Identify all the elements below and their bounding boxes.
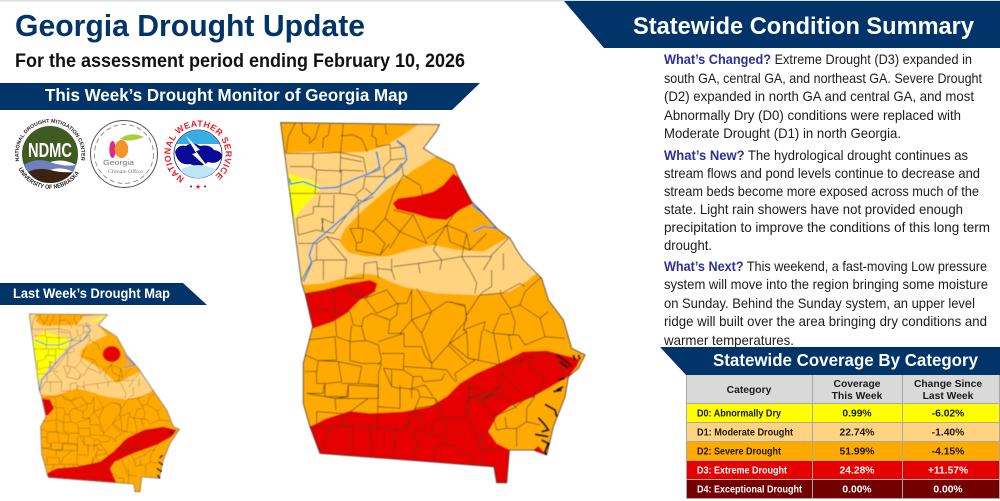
table: coverage by category [686, 375, 1000, 498]
row D3: 24.28% [840, 466, 874, 476]
map: this week's drought monitor of Georgia [280, 121, 586, 484]
row D1: -1.40% [932, 428, 964, 438]
row D1: 22.74% [840, 428, 874, 438]
text block: what's new: stream beds become more exposed across much of the [664, 183, 979, 199]
row D4: D4: Exceptional Drought [697, 484, 802, 496]
row D2 [686, 441, 1000, 460]
county lines [286, 123, 565, 465]
logo: National Weather Service: NATIONAL WEATHER SERVICE [164, 120, 232, 183]
row D4 [686, 479, 1000, 498]
row D3: D3: Extreme Drought [697, 466, 787, 476]
banner: this week's map: This Week’s Drought Monitor of Georgia Map [45, 85, 408, 105]
logo: Georgia Climate Office [90, 120, 158, 188]
D3 extreme drought: northeast [393, 173, 473, 220]
state outline [281, 123, 585, 483]
row D2: -4.15% [932, 446, 964, 458]
text block: what's new: state. Light rain showers have not provided enough [664, 201, 963, 217]
D0 abnormally dry region [287, 173, 321, 218]
text block: what's next: on Sunday. Behind the Sunday system, an upper level [664, 295, 975, 311]
rivers [289, 141, 497, 282]
text block: what's changed: Abnormally Dry (D0) conditions were replaced with [664, 107, 961, 123]
row D0: -6.02% [932, 408, 964, 420]
logo: NDMC: UNIVERSITY OF NEBRASKA [19, 167, 80, 189]
top rule [0, 0, 1000, 2]
logo: Georgia Climate Office: Georgia [103, 158, 135, 167]
row D0: D0: Abnormally Dry [697, 408, 781, 420]
logo: NDMC [14, 119, 86, 189]
table header row: Last Week [923, 391, 974, 402]
text block: what's changed: (D2) expanded in north GA and central GA, and most [664, 88, 974, 104]
logo: NDMC: NDMC [28, 140, 72, 162]
row D4: 0.00% [933, 484, 963, 496]
text block: what's next: warmer temperatures. [663, 332, 794, 348]
banner: statewide coverage by category [660, 347, 1000, 375]
D1 moderate drought region [277, 123, 537, 295]
table header row [686, 375, 1000, 403]
text block: what's new: precipitation to improve the conditions of this long term [664, 219, 990, 235]
logo: Georgia Climate Office: Climate Office [108, 168, 144, 175]
subtitle: assessment period: For the assessment period ending February 10, 2026 [15, 51, 465, 72]
row D0 [686, 403, 1000, 422]
row D1 [686, 422, 1000, 441]
row D2: 51.99% [840, 446, 874, 458]
row D3: +11.57% [928, 466, 968, 476]
D3 extreme drought: west [303, 280, 377, 329]
text block: what's next: ridge will built over the area bringing dry conditions and [664, 313, 987, 329]
table header row: Change Since [914, 379, 982, 390]
banner: last week's map: Last Week’s Drought Map [13, 285, 170, 301]
text block: what's changed: Moderate Drought (D1) in north Georgia. [664, 125, 901, 141]
table header row: Category [727, 385, 772, 396]
coastal marshes [535, 355, 580, 454]
row D4: 0.00% [842, 484, 872, 496]
text block: what's new: What’s New? The hydrological drought continues as [664, 147, 968, 163]
table header row: Coverage [834, 379, 881, 390]
banner: last week's map [0, 283, 207, 305]
text block: what's new: stream flows and pond levels continue to decrease and [664, 165, 980, 181]
banner: statewide condition summary: Statewide Condition Summary [633, 13, 974, 40]
logo: NDMC: NATIONAL DROUGHT MITIGATION CENTER [14, 119, 86, 162]
D3 extreme drought: south and coast [310, 351, 580, 485]
map: last week's drought map [28, 312, 180, 493]
row D3 [686, 460, 1000, 479]
logo: National Weather Service: ★ [195, 183, 201, 191]
row D1: D1: Moderate Drought [697, 428, 794, 438]
text block: what's next [663, 258, 988, 348]
text block: what's changed: What’s Changed? Extreme Drought (D3) expanded in [664, 51, 972, 67]
row D0: 0.99% [842, 408, 872, 420]
text block: what's new [664, 147, 990, 253]
row D2: D2: Severe Drought [697, 446, 781, 458]
banner: this week's map [0, 83, 480, 110]
D3 extreme drought: coastal tip [533, 446, 546, 454]
banner: statewide condition summary [564, 1, 1000, 48]
banner: statewide coverage by category: Statewide Coverage By Category [713, 350, 978, 370]
text block: what's changed [664, 51, 982, 141]
title: Georgia Drought Update [15, 8, 365, 43]
text block: what's new: drought. [664, 237, 712, 253]
table header row: This Week [832, 391, 883, 402]
D2 severe drought base [280, 122, 586, 460]
